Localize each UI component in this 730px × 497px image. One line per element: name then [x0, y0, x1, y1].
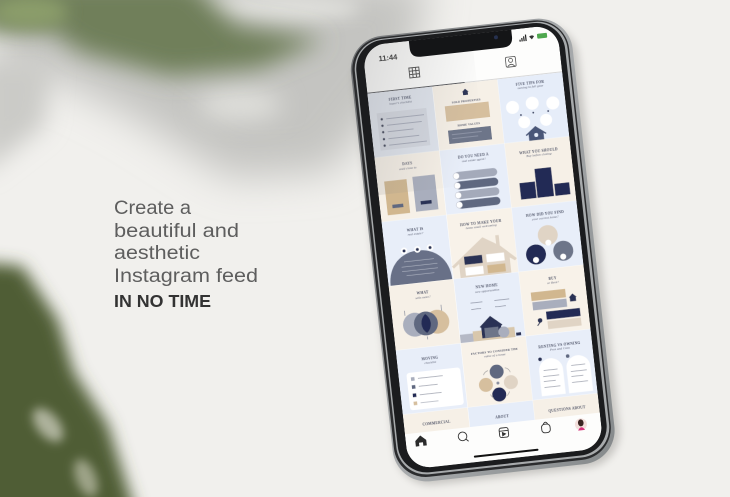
post: venn diagram: sells more? — [415, 294, 431, 300]
icon: home — [415, 435, 427, 447]
blurred leaf: bottom left — [0, 262, 138, 497]
headline text — [114, 198, 258, 311]
post grid — [367, 72, 600, 437]
post: about: ABOUT — [495, 414, 510, 420]
signal and battery — [519, 32, 547, 42]
post: moving checklist — [396, 343, 467, 415]
post: bar chart — [504, 136, 576, 208]
post: five tips: moving in full gear — [517, 83, 544, 90]
post: days: until close to — [399, 165, 417, 171]
post: days: DAYS — [402, 161, 413, 166]
status bar — [378, 32, 548, 63]
post: sold properties — [432, 79, 504, 150]
post: first time: buyer's checklist — [389, 99, 413, 106]
icon: grid tab — [409, 67, 420, 78]
post: new home: NEW HOME — [475, 283, 498, 290]
clock: 11:44 — [378, 52, 399, 63]
headline text: Create a — [114, 198, 191, 219]
post: renting vs owning — [526, 329, 598, 400]
post: about — [468, 400, 535, 429]
phone mockup — [347, 15, 618, 485]
post: first time: FIRST TIME — [388, 95, 412, 102]
headline text: Instagram feed — [114, 266, 258, 287]
post: do you need a: DO YOU NEED A — [458, 152, 489, 160]
post: buy or rent — [519, 265, 591, 336]
post: sold properties: HOME VALUES — [457, 122, 481, 128]
post: renting vs owning: Pros and Cons — [549, 346, 571, 352]
post: buy or rent: BUY — [548, 276, 557, 281]
post: moving checklist: MOVING — [421, 355, 438, 361]
phone body — [347, 15, 618, 485]
icon: shop — [541, 422, 551, 433]
post: questions about — [533, 393, 600, 422]
post: do you need a: real estate agent? — [462, 157, 486, 163]
post: what is real estate — [382, 215, 453, 286]
post: first time — [367, 87, 439, 158]
screen — [362, 23, 604, 474]
headline text: aesthetic — [114, 243, 200, 264]
bottom navigation bar — [405, 412, 602, 468]
post: how did you find — [512, 201, 583, 272]
post: five tips — [497, 72, 569, 144]
post: sold properties: SOLD PROPERTIES — [452, 98, 481, 105]
screen glare — [364, 41, 462, 195]
icon: avatar — [575, 418, 587, 431]
post: venn diagram — [389, 279, 460, 350]
post: venn diagram: WHAT — [416, 290, 429, 296]
post: what is real estate: real estate? — [407, 231, 424, 237]
post: how to make your home — [446, 208, 518, 279]
phone shadow — [350, 21, 624, 489]
post: moving checklist: checklist — [424, 360, 437, 365]
icon: reels — [499, 427, 509, 438]
post: new home: new opportunities — [475, 287, 500, 294]
profile tabs — [368, 56, 562, 94]
post: days — [374, 151, 446, 222]
post: commercial — [403, 408, 470, 437]
post: what is real estate: WHAT IS — [407, 227, 424, 233]
home indicator — [474, 449, 539, 458]
post: new home — [454, 272, 525, 343]
icon: search — [458, 432, 469, 442]
post: how to make your home: HOW TO MAKE YOUR — [460, 219, 502, 227]
post: bar chart: Buy before closing — [526, 151, 552, 158]
post: renting vs owning: RENTING VS OWNING — [538, 341, 581, 349]
post: factors: value of a home — [484, 352, 506, 358]
post: questions about: QUESTIONS ABOUT — [548, 405, 586, 413]
post: bar chart: WHAT YOU SHOULD — [519, 147, 558, 155]
post: how did you find: your current home? — [531, 215, 559, 222]
post: how did you find: HOW DID YOU FIND — [526, 210, 564, 218]
post: do you need a — [440, 144, 511, 215]
notch — [409, 28, 513, 58]
post: how to make your home: home small welcoming — [465, 223, 497, 230]
headline text: beautiful and — [114, 221, 239, 242]
post: commercial: COMMERCIAL — [422, 420, 451, 427]
post: factors: FACTORS TO CONSIDER THE — [471, 347, 518, 356]
emphasis: IN NO TIME — [114, 291, 211, 311]
post: factors — [461, 336, 532, 407]
post: buy or rent: or Rent? — [547, 280, 559, 285]
camera — [494, 35, 498, 40]
post: five tips: FIVE TIPS FOR — [516, 80, 545, 87]
icon: tagged tab — [505, 56, 516, 67]
blurred leaf shadow: top — [0, 0, 430, 178]
